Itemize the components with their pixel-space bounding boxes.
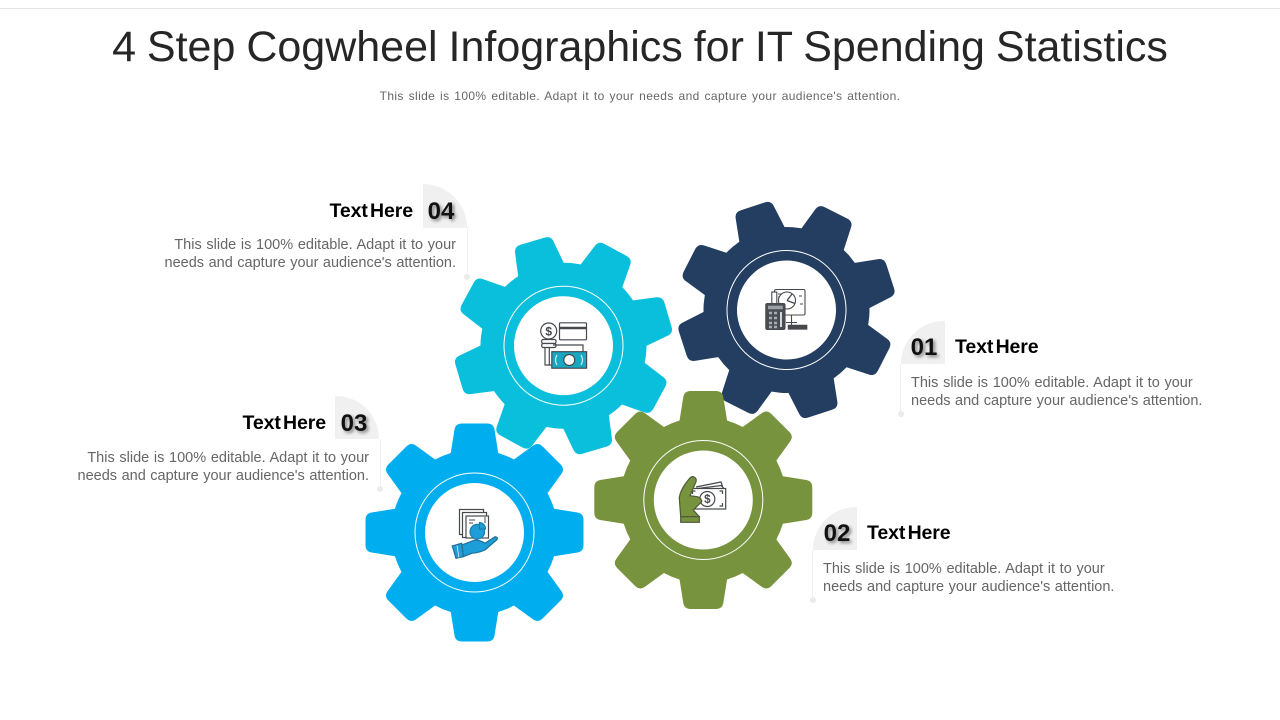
body 03: This slide is 100% editable. Adapt it to your xyxy=(87,450,369,466)
number tab 02 xyxy=(813,507,857,550)
body 02: This slide is 100% editable. Adapt it to your xyxy=(823,561,1105,577)
number 04: 04 xyxy=(428,198,454,225)
label 04 xyxy=(165,184,470,280)
label 03 xyxy=(78,396,383,492)
gear 03: sky blue xyxy=(366,424,584,642)
body 04 xyxy=(165,237,456,271)
top rule xyxy=(0,8,1280,9)
icon: hand holding report xyxy=(452,510,497,558)
connector 02 xyxy=(812,550,813,600)
heading 02: Text Here xyxy=(867,522,951,544)
number 01: 01 xyxy=(911,334,937,361)
icon: coins, card and banknote: $ xyxy=(545,324,552,338)
label 02 xyxy=(810,507,1114,603)
number 02: 02 xyxy=(824,520,850,547)
body 01: This slide is 100% editable. Adapt it to your xyxy=(911,375,1193,391)
heading 04: Text Here xyxy=(329,200,413,222)
number tab 01 xyxy=(901,321,945,364)
body 01 xyxy=(911,375,1202,409)
body 02 xyxy=(823,561,1114,595)
icon: hand holding cash: $ xyxy=(704,494,711,506)
label 01 xyxy=(898,321,1202,417)
heading 01: Text Here xyxy=(955,336,1039,358)
number tab 03 xyxy=(335,396,379,439)
icon: coins, card and banknote xyxy=(541,323,587,368)
heading 03: Text Here xyxy=(242,412,326,434)
body 02: needs and capture your audience's attention. xyxy=(823,579,1114,595)
title: 4 Step Cogwheel Infographics for IT Spending Statistics xyxy=(112,23,1168,71)
subtitle: This slide is 100% editable. Adapt it to your needs and capture your audience's attention. xyxy=(380,89,900,103)
body 03 xyxy=(78,450,369,484)
connector 01 xyxy=(900,364,901,414)
connector 03 xyxy=(380,439,381,489)
dot 01 xyxy=(898,411,904,417)
icon: hand holding cash xyxy=(679,477,726,522)
gear 04: cyan xyxy=(428,210,699,481)
body 04: needs and capture your audience's attention. xyxy=(165,255,456,271)
dot 03 xyxy=(377,486,383,492)
connector 04 xyxy=(467,227,468,277)
gear 01: navy xyxy=(649,173,924,447)
gear 02: olive green xyxy=(594,391,812,609)
number tab 04 xyxy=(423,184,467,228)
dot 04 xyxy=(464,274,470,280)
body 03: needs and capture your audience's attention. xyxy=(78,468,369,484)
body 04: This slide is 100% editable. Adapt it to your xyxy=(174,237,456,253)
body 01: needs and capture your audience's attention. xyxy=(911,393,1202,409)
number 03: 03 xyxy=(341,410,367,437)
dot 02 xyxy=(810,597,816,603)
icon: calculator and monitor xyxy=(766,290,807,330)
